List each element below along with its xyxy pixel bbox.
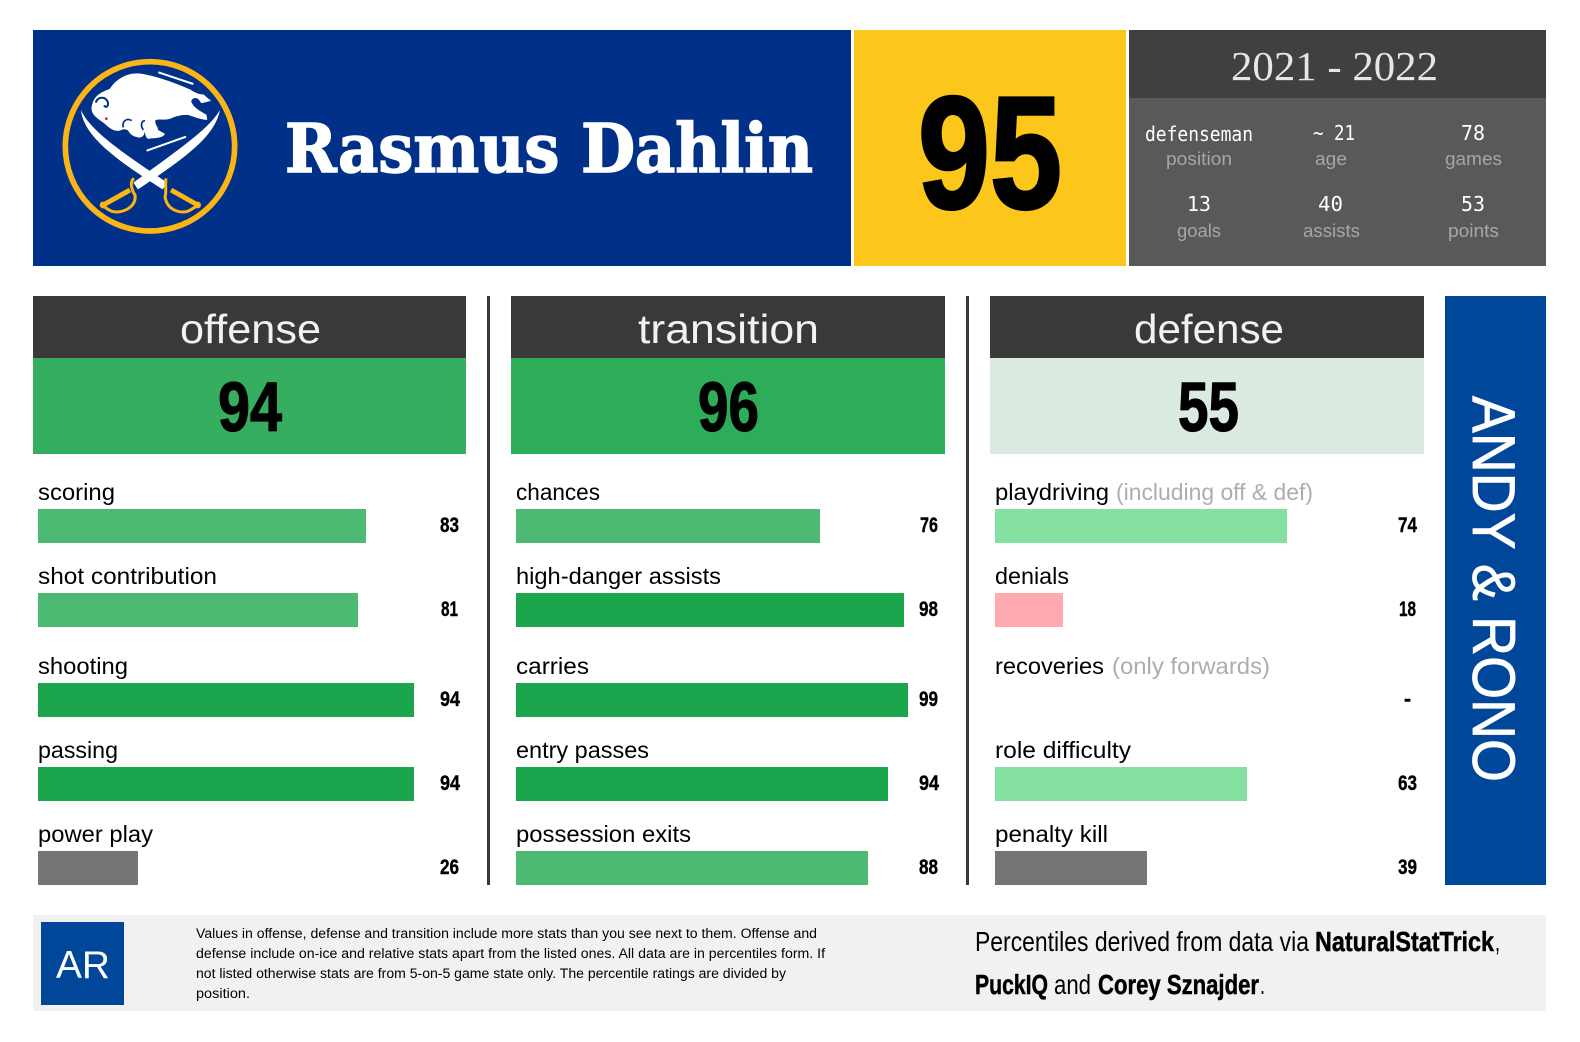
panel: player name banner — [33, 30, 851, 266]
stat: points: 53 — [1461, 192, 1485, 216]
text block: data sources: Percentiles derived from data via — [975, 926, 1309, 957]
bar: carries — [516, 653, 938, 717]
heading: season: 2021 - 2022 — [1231, 43, 1438, 89]
stat: assists: assists — [1303, 221, 1360, 241]
heading: defense: defense — [1134, 306, 1284, 352]
bar: playdriving: playdriving — [995, 479, 1109, 505]
score: offense: 94 — [218, 368, 282, 446]
bar: denials — [995, 563, 1416, 627]
bar: chances: 76 — [920, 514, 938, 537]
bar: denials: denials — [995, 563, 1069, 589]
bar: playdriving: (including off & def) — [1116, 479, 1313, 505]
bar: playdriving: 74 — [1398, 514, 1417, 537]
bar: entry passes: 94 — [919, 772, 939, 795]
stat: assists — [1303, 192, 1360, 241]
text block: methodology note: Values in offense, defense and transition include more stats than you see next to them. Offense and — [196, 926, 817, 941]
stat: position: position — [1166, 149, 1232, 169]
bar: scoring — [38, 479, 459, 543]
bar: scoring: 83 — [440, 514, 459, 537]
bar: penalty kill: penalty kill — [995, 821, 1108, 847]
stat: points: points — [1448, 221, 1499, 241]
bar: shot contribution: shot contribution — [38, 563, 217, 589]
row: recoveries (no bar): - — [1404, 688, 1411, 711]
bar: carries: carries — [516, 653, 589, 679]
stat: games — [1445, 121, 1502, 169]
stat: points — [1448, 192, 1499, 241]
text block: data sources: NaturalStatTrick — [1315, 926, 1494, 957]
row: recoveries (no bar): recoveries — [995, 653, 1104, 679]
stat: position — [1145, 122, 1253, 169]
bar: passing — [38, 737, 460, 801]
panel: defense — [990, 296, 1424, 885]
bar: passing: 94 — [440, 772, 460, 795]
row: recoveries (no bar): (only forwards) — [1112, 653, 1270, 679]
bar: high-danger assists — [516, 563, 938, 627]
text block: methodology note: not listed otherwise stats are from 5-on-5 game state only. The percentile ratings are divided by — [196, 966, 786, 981]
bar: chances: chances — [516, 479, 600, 505]
score: transition: 96 — [698, 368, 759, 446]
bar: denials: 18 — [1399, 598, 1416, 621]
bar: role difficulty: role difficulty — [995, 737, 1132, 763]
text block: methodology note — [196, 926, 825, 1001]
text block: data sources — [975, 926, 1500, 1000]
bar: high-danger assists: high-danger assists — [516, 563, 721, 589]
stat: age: age — [1315, 149, 1347, 169]
row: recoveries (no bar) — [995, 653, 1411, 711]
bar: power play: 26 — [440, 856, 459, 879]
panel: offense — [33, 296, 466, 885]
bar: power play — [38, 821, 459, 885]
bar: shooting: shooting — [38, 653, 128, 679]
stat: age: ~ 21 — [1313, 121, 1355, 145]
panel: author credit — [1445, 296, 1546, 885]
text block: methodology note: position. — [196, 986, 250, 1001]
bar: role difficulty — [995, 737, 1417, 801]
bar: power play: power play — [38, 821, 154, 847]
vertical credit text: ANDY & RONO — [1460, 396, 1527, 782]
title: player name: Rasmus Dahlin — [285, 109, 813, 188]
stat: assists: 40 — [1318, 192, 1343, 216]
stat: age — [1313, 121, 1355, 169]
panel: footer — [33, 915, 1546, 1011]
bar: shooting: 94 — [440, 688, 460, 711]
bar: playdriving — [995, 479, 1417, 543]
bar: shooting — [38, 653, 460, 717]
stat: games: games — [1445, 149, 1502, 169]
heading: transition: transition — [638, 306, 819, 352]
stat: games: 78 — [1461, 121, 1485, 145]
bar: penalty kill — [995, 821, 1417, 885]
text block: data sources: Corey Sznajder — [1098, 969, 1259, 1000]
bar: entry passes — [516, 737, 939, 801]
stat: goals: 13 — [1187, 192, 1211, 216]
heading: offense: offense — [180, 306, 321, 352]
panel: season info — [1129, 30, 1546, 266]
bar: possession exits: possession exits — [516, 821, 691, 847]
bar: penalty kill: 39 — [1398, 856, 1417, 879]
panel: transition — [511, 296, 945, 885]
bar: passing: passing — [38, 737, 118, 763]
text block: data sources: and — [1054, 969, 1091, 1000]
bar: possession exits: 88 — [919, 856, 938, 879]
text block: methodology note: defense include on-ice and relative stats apart from the listed ones. All data are in percentiles form. If — [196, 946, 825, 961]
bar: scoring: scoring — [38, 479, 115, 505]
bar: carries: 99 — [919, 688, 938, 711]
stat: goals: goals — [1177, 221, 1221, 241]
score: defense: 55 — [1178, 368, 1239, 446]
panel: overall rating — [854, 30, 1126, 266]
bar: high-danger assists: 98 — [919, 598, 938, 621]
bar: role difficulty: 63 — [1398, 772, 1417, 795]
bar: entry passes: entry passes — [516, 737, 649, 763]
icon: AR logo — [41, 922, 124, 1005]
bar: shot contribution — [38, 563, 458, 627]
bar: chances — [516, 479, 938, 543]
stat: position: defenseman — [1145, 122, 1253, 146]
text block: data sources: . — [1260, 969, 1265, 1000]
icon: AR logo: AR — [56, 944, 110, 987]
stat: goals — [1177, 192, 1221, 241]
text block: data sources: , — [1495, 926, 1500, 957]
bar: possession exits — [516, 821, 938, 885]
bar: shot contribution: 81 — [441, 598, 458, 621]
text block: data sources: PuckIQ — [975, 969, 1048, 1000]
icon: Buffalo Sabres logo — [65, 62, 235, 231]
overall rating number: 95 — [918, 63, 1062, 242]
